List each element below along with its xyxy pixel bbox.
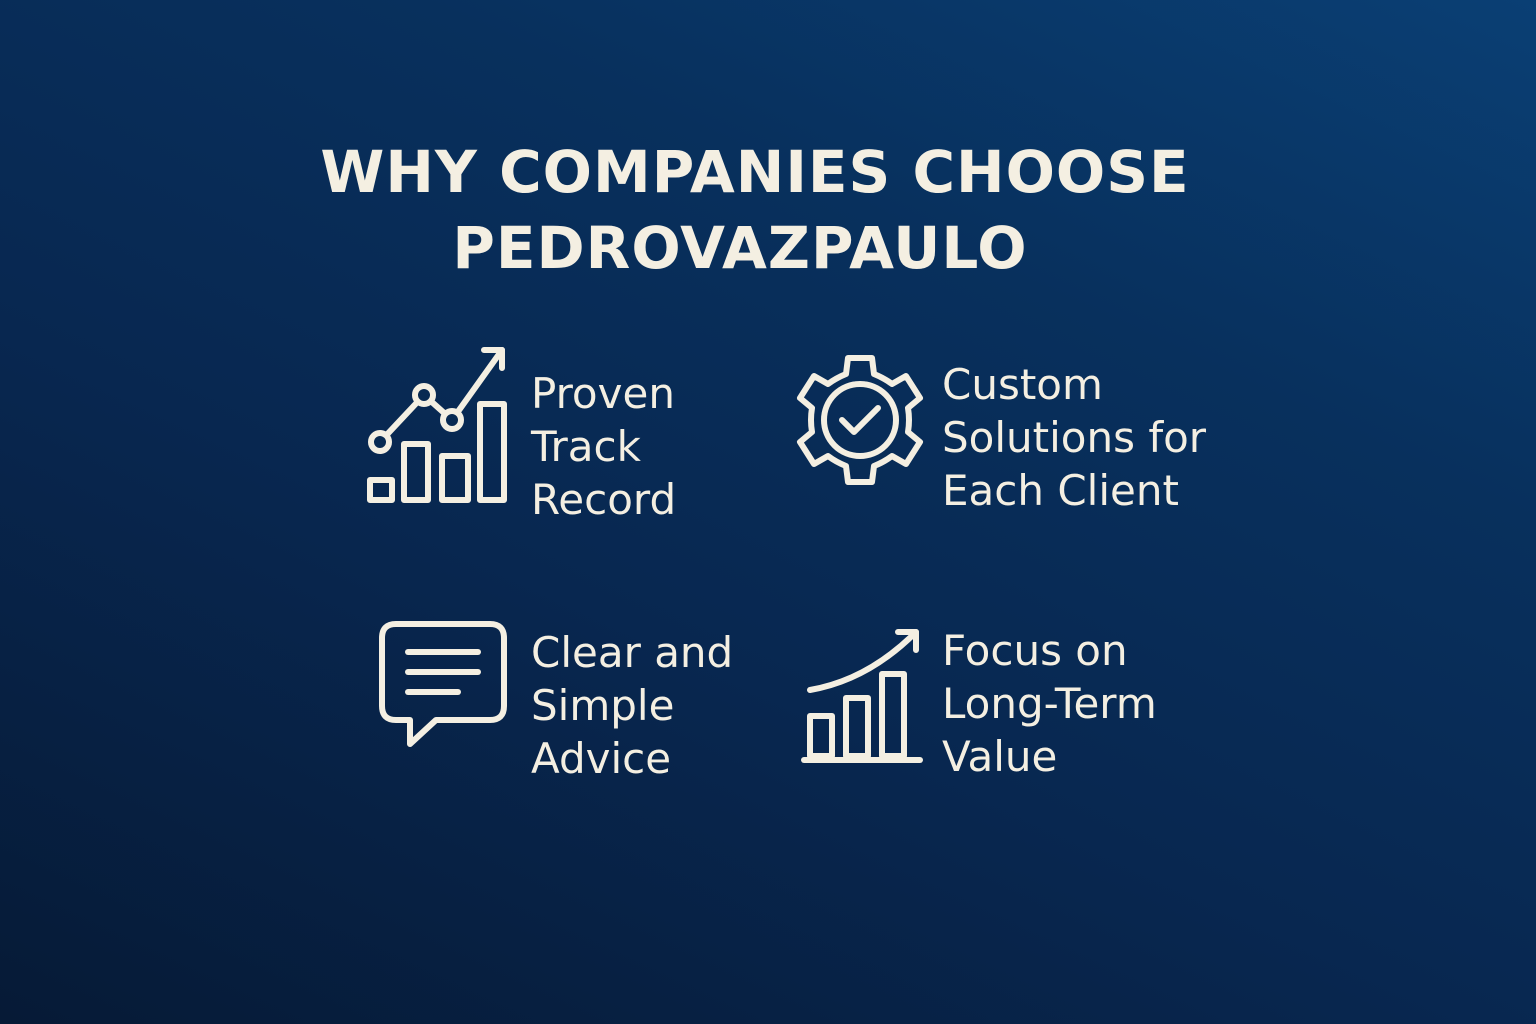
text: long-term value [942,626,1157,781]
text: custom solutions [942,360,1206,515]
text: long-term value: Focus on [942,626,1128,675]
text: clear and simple advice [531,628,733,783]
title [320,138,1190,282]
text: proven track record: Record [531,475,676,524]
text: long-term value: Value [942,732,1057,781]
icon: chat bubble [379,621,507,747]
icon: line and bar chart [367,347,507,503]
text: custom solutions: Solutions for [942,413,1206,462]
icon: gear with check [796,355,924,485]
text: clear and simple advice: Simple [531,681,674,730]
text: proven track record [530,369,676,524]
text: clear and simple advice: Clear and [531,628,733,677]
text: custom solutions: Custom [942,360,1103,409]
icon: rising bar chart [801,629,923,763]
text: proven track record: Proven [531,369,675,418]
title: WHY COMPANIES CHOOSE [320,138,1190,206]
text: clear and simple advice: Advice [531,734,671,783]
title: PEDROVAZPAULO [452,214,1028,282]
text: long-term value: Long-Term [942,679,1157,728]
text: proven track record: Track [531,422,641,471]
text: custom solutions: Each Client [942,466,1179,515]
